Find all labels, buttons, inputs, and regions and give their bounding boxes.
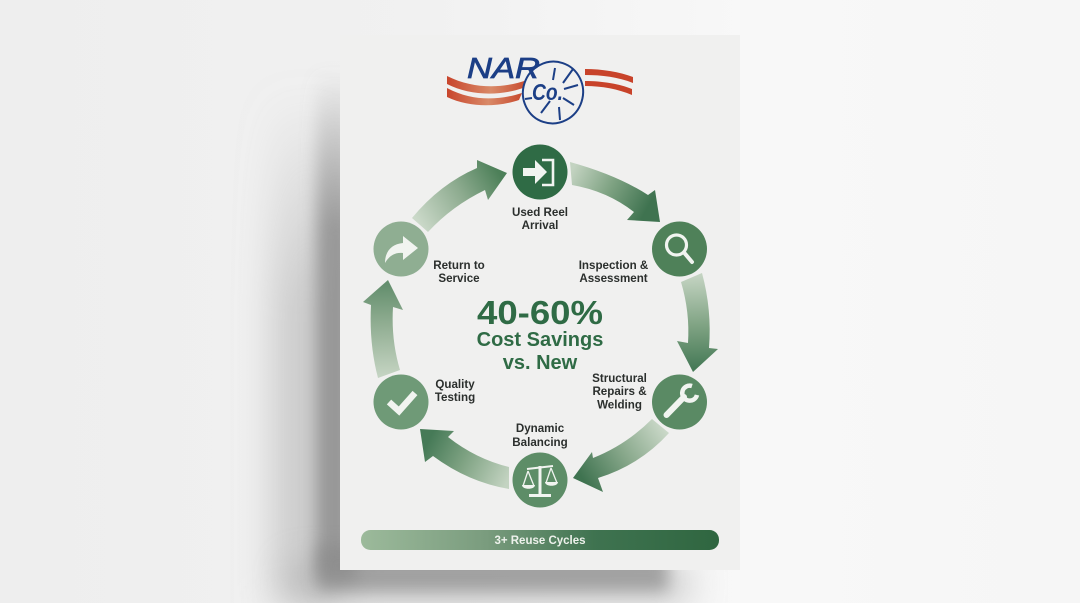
bar label: 3+ Reuse Cycles <box>494 535 586 547</box>
caption line 2: vs. New <box>503 352 578 374</box>
label: Used Reel <box>512 206 568 219</box>
step: Inspection & Assessment <box>579 222 707 285</box>
step: Dynamic Balancing <box>512 422 568 508</box>
card shadow <box>272 70 690 603</box>
icon: share arrow <box>374 222 428 276</box>
label: Return to <box>433 259 485 272</box>
logo wordmark NAR: NAR <box>467 53 540 85</box>
arrow: balancing to testing <box>420 429 509 489</box>
reuse cycles bar <box>361 530 719 550</box>
step: Quality Testing <box>374 374 475 430</box>
logo: NAR Co. <box>447 53 633 131</box>
poster card <box>340 35 740 570</box>
arrow: arrival to inspection <box>570 162 660 222</box>
step: Structural Repairs & Welding <box>592 372 707 430</box>
logo wheel <box>515 54 591 131</box>
label: Testing <box>435 391 475 404</box>
arrow: return to arrival <box>412 160 507 232</box>
arrow: repairs to balancing <box>573 419 669 492</box>
icon: magnifier <box>652 222 707 276</box>
icon: enter door <box>512 144 568 200</box>
label: Assessment <box>579 272 648 285</box>
label: Welding <box>597 398 642 412</box>
logo stripes <box>447 76 527 105</box>
center statistic <box>477 294 603 374</box>
caption line 1: Cost Savings <box>477 329 603 351</box>
arrow: inspection to repairs <box>677 273 718 372</box>
icon: scales <box>512 452 568 508</box>
label: Service <box>438 272 480 285</box>
label: Inspection & <box>579 259 649 272</box>
icon: check mark <box>374 374 428 430</box>
step: Used Reel Arrival <box>512 144 568 232</box>
label: Structural <box>592 372 647 385</box>
logo wordmark Co: Co. <box>532 79 563 105</box>
label: Arrival <box>522 219 558 232</box>
label: Dynamic <box>516 422 565 435</box>
headline number: 40-60% <box>477 294 603 331</box>
icon: wrench <box>652 374 707 430</box>
step: Return to Service <box>374 222 485 285</box>
label: Balancing <box>512 436 568 449</box>
label: Quality <box>435 378 475 391</box>
label: Repairs & <box>592 385 647 398</box>
arrow: testing to return <box>363 280 403 378</box>
